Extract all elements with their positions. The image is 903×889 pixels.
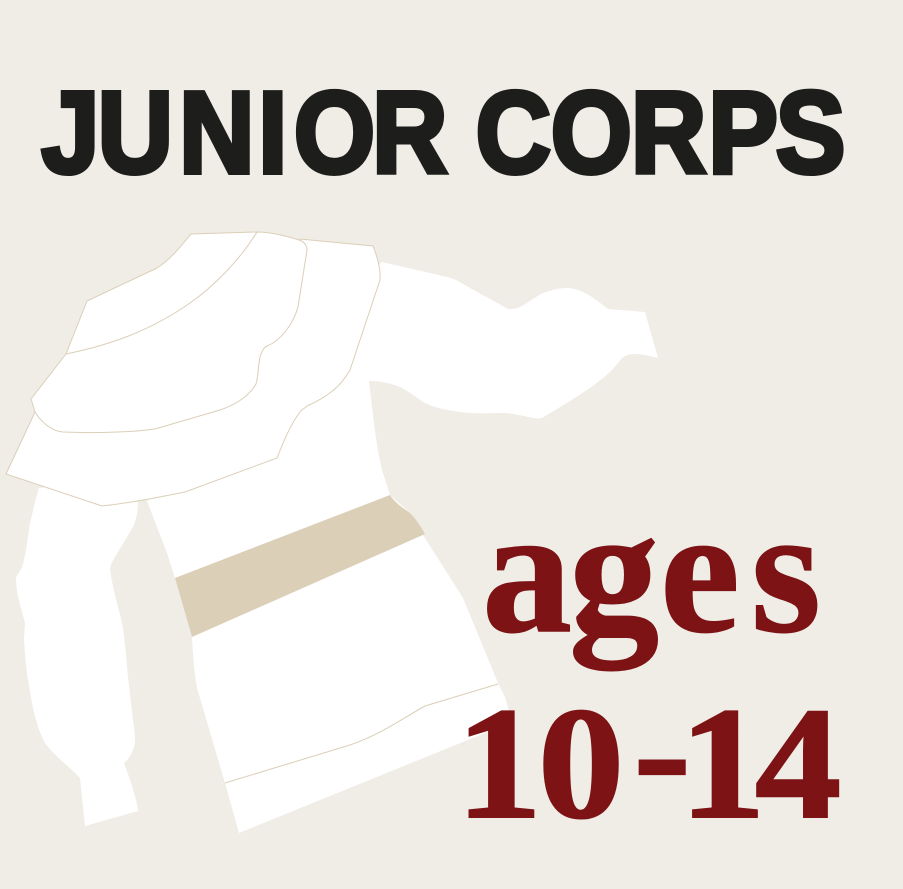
top cape layer: [66, 232, 257, 354]
middle cape layer: [31, 232, 307, 433]
hem line: [225, 684, 498, 783]
ages label: ages: [482, 471, 821, 671]
title: JUNIOR CORPS: [41, 68, 845, 198]
tunic right sleeve: [340, 262, 658, 418]
belt: [175, 495, 425, 637]
tunic left sleeve: [16, 480, 138, 826]
illustration: white tunic: [6, 232, 658, 833]
bottom cape layer: [6, 239, 380, 506]
age range label: 10-14: [456, 664, 841, 853]
tunic body: [147, 320, 512, 833]
